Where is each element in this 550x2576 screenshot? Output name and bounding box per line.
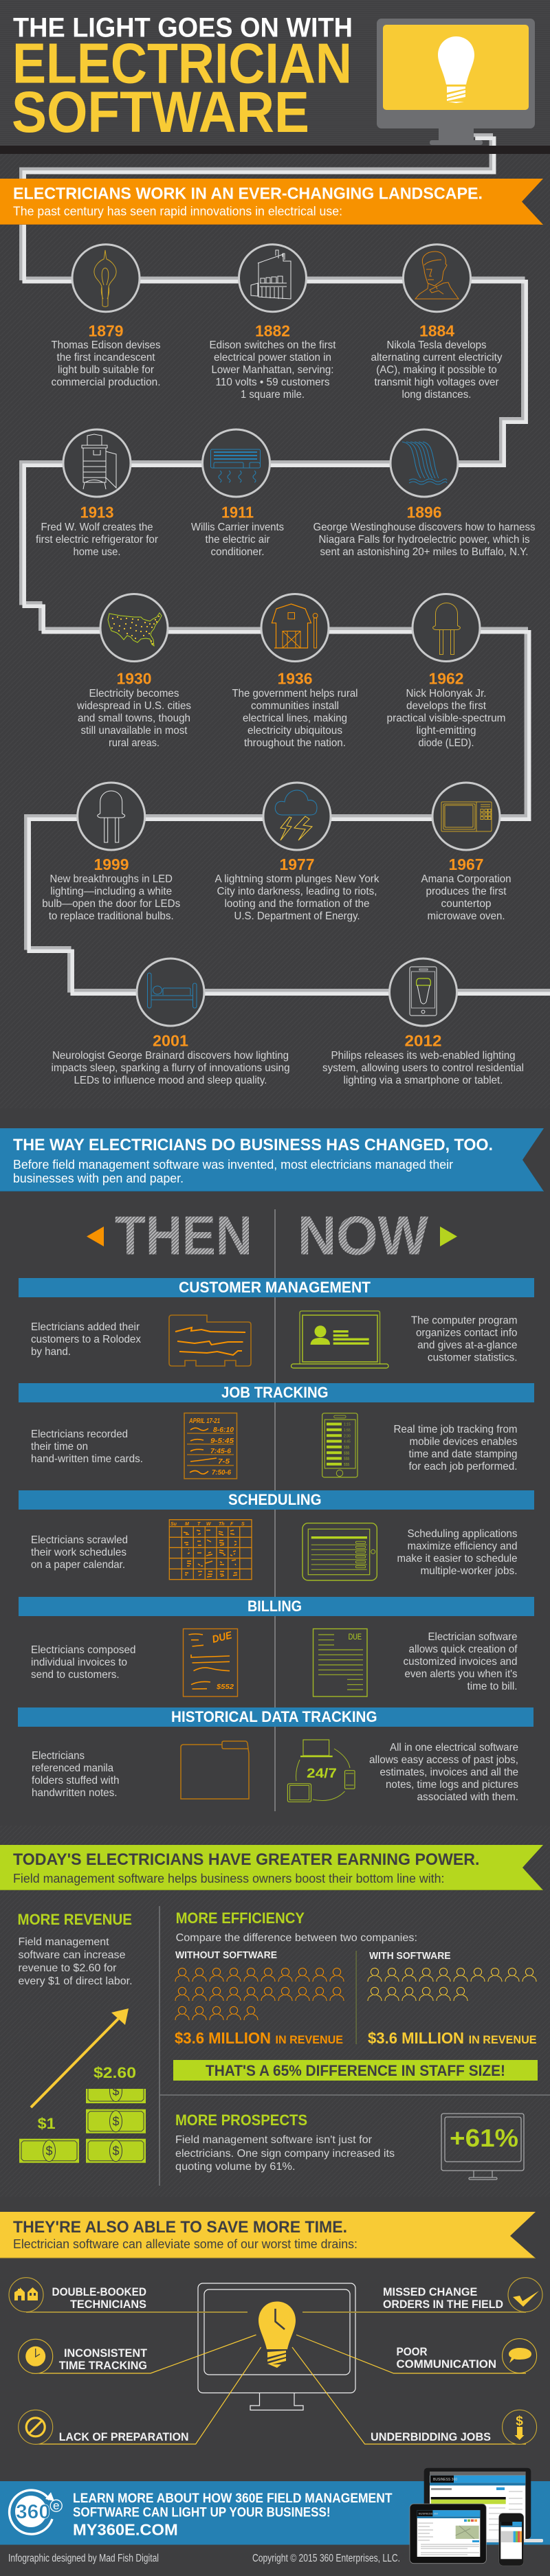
- section: customer management: organizes contact info: [416, 1328, 518, 1339]
- icon: single dollar bill: [19, 2139, 79, 2163]
- icon: paper calendar: W: [206, 1522, 212, 1527]
- panel: more revenue: MORE REVENUE: [18, 1911, 132, 1928]
- logo: 360e: [10, 2490, 62, 2534]
- milestone: 2012: [322, 959, 524, 1086]
- milestone: 1930: rural areas.: [109, 737, 160, 749]
- milestone: 1936: electrical lines, making: [243, 713, 347, 724]
- milestone: 1913: [36, 429, 159, 558]
- then/now centre divider: [274, 1209, 276, 1811]
- milestone: 2012: 2012: [404, 1032, 441, 1050]
- milestone: 1936: communities install: [251, 700, 339, 712]
- section: customer management: customer statistics.: [428, 1352, 517, 1364]
- icon: paper calendar: Th: [219, 1522, 225, 1527]
- milestone: 1911: Willis Carrier invents: [191, 522, 284, 533]
- icon: phone time log: [322, 1413, 358, 1477]
- panel: more efficiency: $3.6 MILLION: [175, 2029, 271, 2047]
- icon: paper time card: 7-5: [218, 1457, 230, 1466]
- milestone: 1936: electricity ubiquitous: [248, 725, 342, 737]
- section: billing: customized invoices and: [403, 1656, 517, 1668]
- milestone: 1913: home use.: [73, 546, 121, 558]
- time drain: poor communication: [396, 2339, 537, 2373]
- icon: paper calendar: [169, 1520, 252, 1580]
- milestone: 1913: Fred W. Wolf creates the: [41, 522, 153, 533]
- section: customer management: and gives at-a-glance: [417, 1340, 518, 1352]
- milestone: 2012: Philips releases its web-enabled lighting: [331, 1050, 516, 1062]
- section: job tracking: time and date stamping: [408, 1448, 517, 1460]
- milestone: 1879: commercial production.: [51, 377, 161, 388]
- icon: dollar bill stack tall: $: [112, 2085, 120, 2098]
- milestone: 2001: LEDs to influence mood and sleep quality.: [74, 1075, 267, 1086]
- icon: dollar bill stack tall: [86, 2089, 146, 2163]
- section: historical data tracking: folders stuffed with: [32, 1775, 120, 1787]
- section: scheduling: their work schedules: [31, 1547, 126, 1558]
- icon: 24/7 devices cycle: [287, 1740, 355, 1802]
- milestone: 1999: lighting—including a white: [50, 886, 172, 897]
- section: historical data tracking: notes, time logs and pictures: [386, 1779, 518, 1791]
- time drain: inconsistent time tracking: TIME TRACKING: [59, 2359, 147, 2372]
- icon: barn: [272, 604, 318, 648]
- milestone: 1962: [386, 594, 506, 749]
- milestone: 1936: The government helps rural: [232, 688, 358, 699]
- ribbon: the way electricians do business: [0, 1128, 544, 1191]
- ribbon: the way electricians do business: businesses with pen and paper.: [13, 1172, 184, 1185]
- milestone: 1962: light-emitting: [417, 725, 476, 737]
- time drain: lack of preparation: [19, 2410, 189, 2444]
- icon: smartphone with smart bulb: [410, 967, 437, 1016]
- title: THE LIGHT GOES ON WITH: [13, 12, 353, 43]
- icon: handwritten invoice: $552: [216, 1683, 234, 1691]
- ribbon: greater earning power: [0, 1845, 543, 1890]
- icon: digital invoice: [314, 1628, 367, 1696]
- icon: single dollar bill: $: [45, 2144, 53, 2158]
- panel: more efficiency: Compare the difference between two companies:: [176, 1932, 417, 1944]
- milestone: 1911: conditioner.: [210, 546, 264, 558]
- milestone: 1977: U.S. Department of Energy.: [234, 910, 360, 922]
- time drain: lack of preparation: LACK OF PREPARATION: [59, 2430, 188, 2443]
- connector lines: [26, 2312, 526, 2444]
- milestone: 1977: looting and the formation of the: [224, 898, 370, 910]
- icon: phone time log: 4:45: [344, 1440, 351, 1444]
- section: customer management: Electricians added their: [31, 1321, 140, 1333]
- milestone: 1882: 1 square mile.: [241, 389, 305, 401]
- ribbon: the way electricians do business: Before field management software was invented, most electricians managed their: [13, 1158, 453, 1172]
- milestone: 2012: system, allowing users to control residential: [322, 1062, 524, 1074]
- icon: phone time log: $$$: [344, 1451, 350, 1455]
- section: historical data tracking: All in one electrical software: [390, 1742, 518, 1754]
- icon: storm cloud: [275, 790, 317, 840]
- ribbon: ever-changing landscape: The past century has seen rapid innovations in electrical use:: [13, 205, 342, 219]
- milestone: 2001: 2001: [153, 1032, 188, 1050]
- label: $2.60: $2.60: [94, 2064, 136, 2081]
- panel: more prospects: electricians. One sign company increased its: [175, 2148, 395, 2160]
- icon: phone time log: 2:30: [344, 1434, 351, 1438]
- milestone: 2012: lighting via a smartphone or tablet.: [344, 1075, 503, 1086]
- icon: laptop contact card: [292, 1311, 388, 1368]
- panel: more prospects: MORE PROSPECTS: [175, 2112, 307, 2129]
- milestone: 1936: throughout the nation.: [244, 737, 346, 749]
- section: customer management: [19, 1278, 534, 1368]
- icon: dollar bill stack tall: $: [112, 2115, 120, 2129]
- section: historical data tracking: Electricians: [32, 1750, 85, 1762]
- milestone: 1962: diode (LED).: [418, 737, 474, 749]
- icon: rolodex card: [169, 1315, 251, 1366]
- icon: phone time log: $$$: [344, 1457, 350, 1461]
- icon: LED gold: [433, 603, 461, 654]
- icon: USA map with lights: [108, 613, 162, 646]
- milestone: 2001: [51, 959, 290, 1086]
- panel: more efficiency: $3.6 MILLION: [368, 2029, 464, 2047]
- panel: more revenue: Field management: [18, 1936, 109, 1948]
- milestone: 1936: 1936: [278, 670, 312, 688]
- milestone: 1884: [371, 245, 502, 401]
- milestone: 1999: [42, 783, 180, 922]
- panel: more efficiency: WITH SOFTWARE: [369, 1951, 451, 1962]
- title: SOFTWARE: [12, 80, 309, 144]
- panel: more revenue: [18, 1911, 146, 2163]
- milestone: 1967: [421, 783, 512, 922]
- icon: tablet scheduler: [302, 1523, 377, 1580]
- title: ELECTRICIAN: [12, 32, 352, 96]
- milestone: 1879: the first incandescent: [56, 352, 155, 363]
- label: $1: $1: [38, 2115, 56, 2132]
- panel: more revenue: every $1 of direct labor.: [18, 1975, 132, 1987]
- ribbon: save more time: THEY'RE ALSO ABLE TO SAVE MORE TIME.: [13, 2218, 347, 2237]
- icon: laptop screenshot: [417, 2468, 543, 2542]
- milestone: 1896: Niagara Falls for hydroelectric power, which is: [319, 534, 529, 546]
- ribbon: greater earning power: TODAY'S ELECTRICIANS HAVE GREATER EARNING POWER.: [13, 1850, 480, 1869]
- section: billing: allows quick creation of: [408, 1644, 518, 1655]
- icon: handwritten invoice: DUE: [211, 1629, 234, 1646]
- milestone: 1930: widespread in U.S. cities: [76, 700, 191, 712]
- milestone: 1896: [314, 429, 535, 558]
- footer credits: [8, 2553, 400, 2564]
- section: job tracking: JOB TRACKING: [221, 1384, 329, 1401]
- milestone: 1967: 1967: [448, 855, 484, 873]
- panel: more revenue: software can increase: [18, 1949, 126, 1961]
- icon: Tesla portrait: [415, 251, 459, 299]
- icon: houses: [14, 2287, 38, 2300]
- icon: monitor +61%: +61%: [450, 2124, 518, 2152]
- time drain: double-booked technicians: [9, 2278, 146, 2312]
- icon: paper time card: 9-5:45: [210, 1437, 234, 1445]
- icon: central monitor with clock bulb: [198, 2283, 355, 2410]
- icon: staff with software: [368, 1968, 536, 2001]
- dark header band: [0, 146, 550, 154]
- icon: LED white: [98, 791, 125, 842]
- icon: monitor +61%: [441, 2114, 524, 2180]
- milestone: 2001: Neurologist George Brainard discovers how lighting: [52, 1050, 289, 1062]
- time drain: poor communication: POOR: [396, 2345, 428, 2358]
- ribbon: ever-changing landscape: [0, 179, 543, 225]
- milestone: 1913: first electric refrigerator for: [36, 534, 159, 546]
- time drain: inconsistent time tracking: [19, 2339, 148, 2373]
- icon: paper time card: 7:50-6: [212, 1468, 231, 1477]
- section: customer management: CUSTOMER MANAGEMENT: [179, 1279, 371, 1296]
- icon: refrigerator: [82, 434, 116, 489]
- section: historical data tracking: handwritten notes.: [32, 1787, 117, 1799]
- title: [12, 12, 353, 144]
- footer credits: Copyright © 2015 360 Enterprises, LLC.: [252, 2553, 400, 2564]
- section: billing: BILLING: [248, 1598, 302, 1615]
- section: scheduling: make it easier to schedule: [397, 1553, 518, 1565]
- ribbon: the way electricians do business: THE WAY ELECTRICIANS DO BUSINESS HAS CHANGED, TOO.: [13, 1136, 493, 1154]
- panel: more efficiency: IN REVENUE: [275, 2033, 343, 2046]
- section: scheduling: SCHEDULING: [228, 1491, 322, 1508]
- milestone: 1879: Thomas Edison devises: [51, 339, 161, 351]
- milestone: 1999: 1999: [94, 855, 129, 873]
- time drain: missed change orders: ORDERS IN THE FIELD: [383, 2298, 503, 2311]
- panel: more efficiency: MORE EFFICIENCY: [176, 1909, 305, 1927]
- section: scheduling: multiple-worker jobs.: [421, 1565, 517, 1577]
- icon: check mark: [513, 2291, 539, 2307]
- ribbon: save more time: Electrician software can alleviate some of our worst time drains:: [13, 2237, 358, 2251]
- milestone: 1930: Electricity becomes: [89, 688, 179, 699]
- milestone: 1999: bulb—open the door for LEDs: [42, 898, 180, 910]
- icon: phone screenshot: [499, 2513, 524, 2566]
- panel: more prospects: quoting volume by 61%.: [175, 2161, 296, 2173]
- ribbon: ever-changing landscape: ELECTRICIANS WORK IN AN EVER-CHANGING LANDSCAPE.: [13, 184, 483, 203]
- icon: staff without software: [175, 1968, 344, 2020]
- icon: handwritten invoice: [183, 1628, 238, 1696]
- timeline wire: [21, 135, 550, 994]
- icon: phone time log: 1:55: [344, 1429, 351, 1433]
- section: billing: Electrician software: [428, 1631, 518, 1643]
- milestone: 1879: 1879: [88, 322, 124, 339]
- milestone: 1911: 1911: [221, 504, 254, 522]
- icon: paper calendar: T: [197, 1522, 201, 1527]
- section: customer management: customers to a Rolodex: [31, 1334, 141, 1345]
- icon: phone time log: 1:15: [344, 1423, 351, 1427]
- section: job tracking: for each job performed.: [408, 1461, 517, 1472]
- section: scheduling: Scheduling applications: [407, 1528, 517, 1540]
- milestone: 1884: Nikola Tesla develops: [386, 339, 487, 351]
- icon: tablet screenshot: [410, 2504, 486, 2564]
- ribbon: save more time: [0, 2212, 536, 2258]
- icon: paper calendar: F: [230, 1522, 234, 1527]
- milestone: 1879: [51, 245, 161, 388]
- milestone: 1896: George Westinghouse discovers how to harness: [314, 522, 535, 533]
- footer credits: Infographic designed by Mad Fish Digital: [8, 2553, 159, 2564]
- time drain: double-booked technicians: DOUBLE-BOOKED: [52, 2285, 146, 2298]
- milestone: 1882: Lower Manhattan, serving:: [212, 364, 334, 376]
- icon: paper calendar: M: [185, 1522, 189, 1527]
- icon: paper calendar: Su: [170, 1522, 177, 1527]
- icon: dollar with down arrow: $: [516, 2415, 523, 2428]
- milestone: 1882: [209, 245, 336, 401]
- milestone: 1913: 1913: [80, 504, 114, 522]
- section: job tracking: their time on: [31, 1441, 88, 1453]
- milestone: 1884: long distances.: [402, 389, 472, 401]
- callout: 65% difference: THAT'S A 65% DIFFERENCE IN STAFF SIZE!: [206, 2062, 505, 2079]
- icon: clock: [25, 2347, 45, 2366]
- milestone: 1930: still unavailable in most: [81, 725, 188, 737]
- section: billing: time to bill.: [468, 1681, 517, 1692]
- milestone: 1882: 1882: [255, 322, 290, 339]
- milestone: 1911: the electric air: [205, 534, 270, 546]
- icon: air conditioner: [210, 449, 260, 482]
- panel: more efficiency: IN REVENUE: [469, 2033, 537, 2046]
- icon: phone time log: $$$: [344, 1446, 350, 1450]
- section: billing: Electricians composed: [31, 1644, 136, 1656]
- section: scheduling: on a paper calendar.: [31, 1559, 125, 1571]
- milestone: 1911: [191, 429, 284, 558]
- milestone: 1882: Edison switches on the first: [209, 339, 336, 351]
- milestone: 1977: [214, 783, 380, 922]
- section: historical data tracking: allows easy access of past jobs,: [369, 1754, 518, 1766]
- section: job tracking: mobile devices enables: [410, 1436, 517, 1448]
- icon: prohibited sign: [26, 2418, 45, 2437]
- section: job tracking: hand-written time cards.: [31, 1453, 143, 1465]
- time drain: underbidding jobs: UNDERBIDDING JOBS: [371, 2430, 491, 2443]
- milestone: 1930: and small towns, though: [78, 713, 190, 724]
- icon: waterfall: [402, 442, 447, 484]
- icon: digital invoice: DUE: [349, 1632, 362, 1642]
- milestone: 1896: 1896: [407, 504, 441, 522]
- icon: phone time log: $$$: [344, 1463, 350, 1467]
- milestone: 1930: [76, 594, 191, 749]
- section: scheduling: Electricians scrawled: [31, 1534, 128, 1546]
- section: billing: [19, 1597, 534, 1696]
- milestone: 1967: produces the first: [426, 886, 507, 897]
- time drain: missed change orders: [383, 2278, 542, 2312]
- icon: Edison bulb: [94, 250, 116, 306]
- section: billing: even alerts you when it's: [404, 1668, 517, 1680]
- section: historical data tracking: associated with them.: [417, 1791, 518, 1803]
- milestone: 1930: 1930: [117, 670, 151, 688]
- section: billing: individual invoices to: [31, 1657, 127, 1668]
- milestone: 1999: to replace traditional bulbs.: [49, 910, 174, 922]
- footer call to action: [0, 2481, 550, 2545]
- milestone: 1962: 1962: [429, 670, 463, 688]
- milestone: 1879: light bulb suitable for: [58, 364, 155, 376]
- icon: microwave: [441, 802, 492, 831]
- section: job tracking: Electricians recorded: [31, 1429, 128, 1440]
- milestone: 1962: practical visible-spectrum: [386, 713, 506, 724]
- section: job tracking: Real time job tracking from: [393, 1424, 517, 1435]
- icon: paper calendar: S: [241, 1522, 245, 1527]
- icon: 24/7 devices cycle: 24/7: [307, 1767, 337, 1781]
- milestone: 1977: A lightning storm plunges New York: [214, 873, 380, 885]
- milestone: 1962: Nick Holonyak Jr.: [406, 688, 487, 699]
- footer call to action: LEARN MORE ABOUT HOW 360E FIELD MANAGEMENT: [73, 2491, 393, 2506]
- milestone: 1884: alternating current electricity: [371, 352, 502, 363]
- milestone: 1896: sent an astonishing 20+ miles to Buffalo, N.Y.: [320, 546, 528, 558]
- icon: speech bubble: [509, 2348, 531, 2363]
- milestone: 1977: City into darkness, leading to riots,: [217, 886, 377, 897]
- logo: 360e: e: [53, 2499, 59, 2512]
- milestone: 1962: develops the first: [406, 700, 487, 712]
- section: historical data tracking: estimates, invoices and all the: [380, 1767, 518, 1778]
- icon: bed: [147, 973, 197, 1008]
- icon: power station: [251, 250, 291, 299]
- panel: more efficiency: WITHOUT SOFTWARE: [175, 1950, 277, 1961]
- heading: now: NOW: [298, 1205, 428, 1266]
- section: customer management: The computer program: [411, 1315, 517, 1327]
- earnings dividers: [160, 1906, 550, 2186]
- milestone: 1882: electrical power station in: [214, 352, 331, 363]
- icon: paper time card: APRIL 17-21: [188, 1417, 220, 1425]
- section: historical data tracking: HISTORICAL DATA TRACKING: [171, 1708, 377, 1725]
- panel: more efficiency: [173, 1909, 538, 2081]
- section: customer management: by hand.: [31, 1346, 71, 1358]
- milestone: 1967: countertop: [441, 898, 492, 910]
- arrow: revenue growth: [31, 2008, 129, 2107]
- section: historical data tracking: [18, 1707, 534, 1803]
- footer call to action: SOFTWARE CAN LIGHT UP YOUR BUSINESS!: [73, 2506, 331, 2520]
- heading: then: THEN: [115, 1205, 252, 1266]
- time drain: double-booked technicians: TECHNICIANS: [70, 2298, 146, 2311]
- logo: 360e: 360: [16, 2501, 50, 2523]
- time drain: inconsistent time tracking: INCONSISTENT: [64, 2347, 148, 2360]
- section: billing: send to customers.: [31, 1669, 120, 1681]
- icon: laptop screenshot: BUSINESS 360: [433, 2478, 457, 2482]
- panel: more prospects: Field management software isn't just for: [175, 2134, 373, 2146]
- icon: paper time card: [184, 1413, 236, 1479]
- milestone: 1967: microwave oven.: [428, 910, 505, 922]
- section: job tracking: [19, 1383, 534, 1479]
- footer call to action: MY360E.COM: [73, 2521, 178, 2539]
- icon: manila folder: [181, 1741, 249, 1799]
- section: scheduling: [19, 1490, 534, 1580]
- section: scheduling: maximize efficiency and: [407, 1541, 517, 1552]
- panel: more revenue: revenue to $2.60 for: [18, 1962, 117, 1974]
- icon: dollar with down arrow: [514, 2415, 524, 2440]
- milestone: 1977: 1977: [279, 855, 315, 873]
- milestone: 1884: (AC), making it possible to: [376, 364, 497, 376]
- milestone: 2001: impacts sleep, sparking a flurry of innovations using: [51, 1062, 290, 1074]
- time drain: missed change orders: MISSED CHANGE: [383, 2285, 477, 2298]
- panel: more prospects: [175, 2112, 524, 2180]
- icon: tablet screenshot: BUSINESS 360: [419, 2512, 439, 2515]
- ribbon: greater earning power: Field management software helps business owners boost their bottom line with:: [13, 1872, 444, 1885]
- milestone: 1967: Amana Corporation: [421, 873, 512, 885]
- milestone: 1999: New breakthroughs in LED: [50, 873, 173, 885]
- milestone: 1884: 1884: [419, 322, 454, 339]
- section: historical data tracking: referenced manila: [32, 1762, 113, 1774]
- icon: dollar bill stack tall: $: [112, 2144, 120, 2158]
- milestone: 1936: [232, 594, 358, 749]
- icon: paper time card: 7:45-6: [210, 1447, 231, 1455]
- milestone: 1882: 110 volts • 59 customers: [216, 377, 330, 388]
- icon: paper time card: 8-6:10: [213, 1426, 234, 1434]
- time drain: underbidding jobs: [371, 2410, 537, 2444]
- time drain: poor communication: COMMUNICATION: [396, 2357, 496, 2371]
- milestone: 1884: transmit high voltages over: [374, 377, 499, 388]
- icon: monitor with light bulb: [377, 19, 535, 145]
